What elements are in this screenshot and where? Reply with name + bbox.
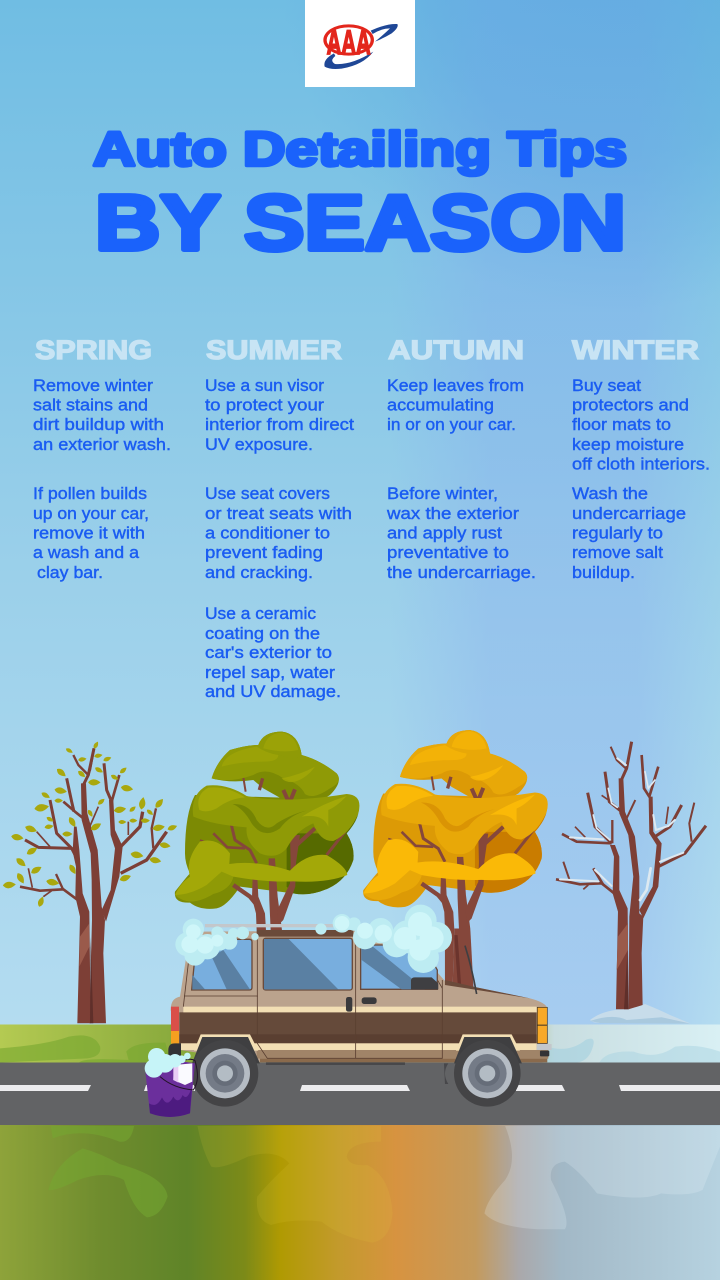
title line 1: Auto Detailing Tips: [93, 124, 627, 176]
column: spring: [33, 335, 171, 582]
spring tips: salt stains and: [33, 396, 148, 414]
wheel arches: [194, 1034, 258, 1051]
under-car shadow: [266, 1062, 405, 1065]
summer tips: a conditioner to: [205, 524, 330, 542]
logo: AAA badge: AAA: [327, 24, 371, 62]
winter tips: [572, 376, 710, 582]
autumn tips: accumulating: [387, 396, 494, 414]
door handles: [346, 997, 352, 1012]
cloth: [173, 1063, 192, 1085]
autumn tips: Keep leaves from: [387, 376, 524, 395]
title: [93, 124, 627, 266]
car: [168, 924, 552, 1107]
summer tips: prevent fading: [205, 543, 323, 562]
door lines: [183, 937, 442, 1058]
heading: autumn: AUTUMN: [388, 335, 524, 365]
tree: summer: [175, 732, 359, 930]
autumn tips: [386, 376, 536, 582]
autumn tips: in or on your car.: [387, 415, 516, 434]
spring tips: an exterior wash.: [33, 435, 171, 454]
winter tips: remove salt: [572, 543, 663, 562]
column: winter: [572, 335, 710, 582]
autumn tips: Before winter,: [387, 484, 498, 503]
handle: [160, 1059, 197, 1090]
winter tips: Wash the: [572, 484, 648, 503]
summer tips: Use a sun visor: [205, 376, 324, 395]
spring tips: clay bar.: [37, 563, 103, 582]
mirror: [411, 977, 438, 989]
windows: [192, 938, 437, 990]
summer tips: repel sap, water: [205, 663, 335, 682]
summer tips: Use a ceramic: [205, 604, 317, 623]
rear wheel: [192, 1040, 258, 1107]
bucket: [145, 1048, 197, 1117]
spring tips: If pollen builds: [33, 484, 147, 503]
tree: autumn: [363, 730, 548, 1002]
ground strip: [0, 1024, 720, 1064]
title line 2: BY SEASON: [95, 178, 626, 266]
rear bumper: [168, 1043, 181, 1057]
autumn tips: the undercarriage.: [387, 563, 536, 582]
logo: AAA badge: [305, 0, 415, 87]
roof rack: [205, 924, 333, 927]
foam: soap suds: [175, 905, 452, 973]
autumn tips: and apply rust: [387, 524, 502, 542]
antenna: [465, 946, 477, 994]
winter tips: undercarriage: [572, 504, 686, 523]
spring tips: dirt buildup with: [33, 415, 164, 434]
summer tips: or treat seats with: [205, 504, 352, 523]
summer tips: Use seat covers: [205, 484, 330, 503]
summer tips: coating on the: [205, 624, 320, 643]
summer tips: UV exposure.: [205, 435, 313, 454]
winter tips: off cloth interiors.: [572, 454, 710, 474]
road: [0, 1062, 720, 1126]
summer tips: [205, 376, 354, 701]
winter tips: protectors and: [572, 396, 689, 414]
summer tips: interior from direct: [205, 415, 354, 434]
column: autumn: [386, 335, 536, 582]
spring tips: [33, 376, 171, 582]
front wheel: [454, 1040, 521, 1107]
heading: spring: SPRING: [35, 335, 152, 365]
winter tips: floor mats to: [572, 415, 671, 434]
winter tips: buildup.: [572, 563, 635, 582]
summer tips: car's exterior to: [205, 643, 332, 662]
heading: winter: WINTER: [572, 335, 699, 365]
summer tips: to protect your: [205, 396, 324, 414]
suds on bucket: [145, 1048, 191, 1078]
car body: [171, 931, 548, 1062]
winter tips: keep moisture: [572, 435, 684, 454]
spring tips: up on your car,: [33, 504, 149, 523]
column: summer: [205, 335, 354, 701]
tree: winter: [556, 742, 706, 1024]
spring tips: a wash and a: [33, 543, 140, 562]
autumn tips: preventative to: [387, 543, 509, 562]
winter tips: regularly to: [572, 524, 663, 542]
summer tips: and cracking.: [205, 563, 313, 582]
snow mound: [590, 1004, 691, 1024]
bottom ground: [0, 1125, 720, 1280]
heading: summer: SUMMER: [206, 335, 342, 365]
autumn tips: wax the exterior: [386, 504, 519, 523]
spring tips: remove it with: [33, 524, 145, 542]
winter tips: Buy seat: [572, 376, 641, 395]
spring tips: Remove winter: [33, 376, 153, 395]
summer tips: and UV damage.: [205, 682, 341, 701]
lights: [171, 1007, 179, 1031]
tree: spring: [3, 741, 178, 1023]
